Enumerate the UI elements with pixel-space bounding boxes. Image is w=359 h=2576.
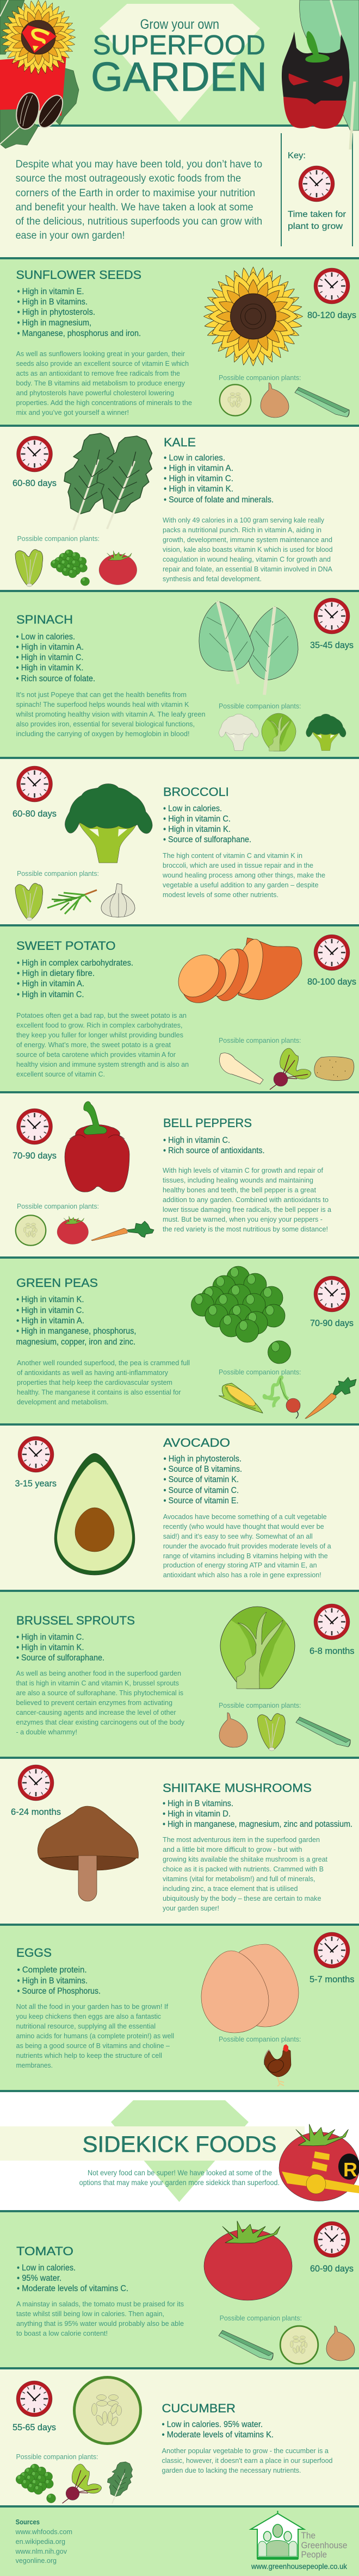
panel: avocado	[0, 1426, 359, 1590]
bullet list	[17, 2263, 128, 2293]
bullet list: • High in vitamin K.	[16, 663, 84, 673]
body text: growth, development, immune system maintenance and	[163, 536, 332, 544]
icon: eggs	[201, 1944, 299, 2033]
bullet list: • 95% water.	[17, 2274, 61, 2283]
bullet list: • High in B vitamins.	[163, 1799, 233, 1808]
radish	[264, 1377, 300, 1418]
body text: membranes.	[16, 2061, 53, 2069]
body text: coagulation in wound healing, vitamin C for growth and	[163, 555, 331, 563]
panel: sidekick foods banner	[0, 2092, 359, 2210]
body text: addition to any garden. Combined with antioxidants to	[163, 1196, 329, 1204]
body text: Another well rounded superfood, the pea is crammed full	[17, 1359, 190, 1367]
body text: garden due to lacking the necessary nutrients.	[162, 2466, 301, 2474]
bullet list: • High in vitamin C.	[163, 1136, 230, 1145]
bullet list: • High in vitamin C.	[164, 474, 233, 483]
companion label: Possible companion plants:	[219, 702, 301, 710]
bullet list: • High in vitamin A.	[16, 1316, 84, 1326]
bullet list: • High in magnesium,	[17, 319, 91, 327]
body text	[16, 2300, 184, 2337]
intro text: Not every food can be super! We have looked at some of the	[88, 2168, 272, 2177]
heading: AVOCADO	[163, 1436, 230, 1449]
body text: including zinc, a trace element that is utilised	[163, 1884, 298, 1893]
banner ribbon	[0, 2126, 305, 2161]
bullet list: • Moderate levels of vitamins K.	[162, 2430, 274, 2440]
illustration: superhero sunflower	[0, 0, 82, 148]
body text: The high content of vitamin C and vitamin K in	[163, 851, 302, 860]
body text: healthy bones and teeth, the bell pepper is a great	[163, 1186, 316, 1194]
body text	[16, 350, 192, 416]
icon: clock	[16, 436, 52, 472]
panel: sunflower seeds	[0, 259, 359, 425]
title	[91, 17, 267, 99]
bullet list: • Low in calories.	[164, 453, 225, 463]
body text: nutrients which help to keep the structure of cell	[16, 2051, 162, 2059]
key box: Time taken for	[288, 210, 346, 219]
icon: sweet potato slices	[170, 936, 302, 1012]
companion plants	[219, 1377, 356, 1418]
heading: SIDEKICK FOODS	[83, 2131, 276, 2157]
body text: spinach! The superfood helps wounds heal with vitamin K	[16, 700, 189, 708]
body text: amino acids for humans (a complete protein!) as well	[16, 2032, 174, 2040]
heading: SWEET POTATO	[16, 939, 116, 953]
body text: A mainstay in salads, the tomato must be praised for its	[16, 2300, 184, 2308]
icon: avocado	[54, 1453, 135, 1575]
body text	[16, 1011, 189, 1078]
bullet list: • Rich source of folate.	[16, 674, 95, 683]
body text	[163, 516, 333, 583]
body text: tissues, including healing wounds and maintaining	[163, 1176, 313, 1184]
panel: footer	[0, 2507, 359, 2576]
icon: broccoli	[65, 784, 152, 863]
intro text: corners of the Earth in order to maximise your nutrition	[16, 188, 255, 199]
sources	[15, 2518, 72, 2565]
icon: clock	[16, 2381, 52, 2417]
icon: sunflower	[196, 259, 311, 374]
body text	[162, 851, 325, 899]
body text: development and metabolism.	[17, 1398, 109, 1406]
bullet list	[164, 453, 274, 505]
companion label: Possible companion plants:	[17, 534, 100, 543]
icon: cucumber	[74, 2377, 140, 2443]
icon: clock	[314, 1932, 350, 1968]
body text: modest levels of some other nutrients.	[163, 891, 278, 899]
panel: cucumber	[0, 2369, 359, 2505]
body text: broccoli, which are used in tissue repair and in the	[163, 861, 313, 869]
intro text	[79, 2168, 280, 2187]
website url: www.greenhousepeople.co.uk	[251, 2562, 348, 2571]
companion plants	[15, 550, 137, 587]
bullet list	[17, 287, 141, 338]
bullet list: • High in vitamin K.	[164, 484, 233, 494]
icon: clock	[314, 268, 350, 304]
body text: properties that help keep the cardiovascular system	[17, 1378, 172, 1386]
bullet list	[163, 1136, 264, 1155]
illustration: superhero pepper with spinach	[282, 0, 359, 150]
body text: and phytosterols have powerful cholesterol lowering	[16, 389, 174, 397]
bullet list: • High in vitamin C.	[163, 814, 231, 824]
bullet list: • Source of B vitamins.	[163, 1465, 242, 1474]
carrot	[91, 1221, 154, 1241]
bullet list: • High in vitamin C.	[17, 990, 84, 999]
body text: they keep you fuller for longer whilst providing bundles	[16, 1031, 183, 1039]
body text: must. But be warned, when you enjoy your peppers -	[163, 1215, 323, 1223]
bullet list	[16, 1633, 104, 1663]
companion label: Possible companion plants:	[219, 1036, 301, 1044]
body text: It's not just Popeye that can get the health benefits from	[16, 690, 187, 699]
body text: As well as being another food in the superfood garden	[16, 1669, 181, 1677]
body text: Avocados have become something of a cult vegetable	[163, 1513, 327, 1521]
icon: clock	[16, 1109, 52, 1144]
body text: to boast a low calorie content!	[16, 2329, 108, 2337]
icon: clock	[18, 1765, 54, 1801]
body text: vision, kale also boasts vitamin K which is used for blood	[163, 545, 333, 553]
icon: clock	[314, 935, 350, 970]
panel: green peas	[0, 1259, 359, 1423]
heading: TOMATO	[16, 2244, 73, 2258]
body text: your garden super!	[163, 1904, 219, 1912]
body text: lower tissue damaging free radicals, the bell pepper is a	[163, 1205, 332, 1214]
body text: healthy vision and immune system strength and is also an	[16, 1060, 189, 1068]
icon: clock	[314, 1276, 350, 1312]
body text: seeds also provide an excellent source of vitamin E which	[16, 359, 189, 368]
bullet list: • High in vitamin E.	[17, 287, 84, 296]
body text: source of beta carotene which provides vitamin A for	[16, 1050, 176, 1059]
bullet list	[162, 2420, 274, 2440]
time label: 55-65 days	[13, 2422, 56, 2432]
bullet list: magnesium, copper, iron and zinc.	[16, 1337, 135, 1347]
heading: KALE	[164, 435, 196, 449]
panel: kale	[0, 427, 359, 590]
time label: 60-80 days	[13, 808, 57, 819]
body text	[163, 1835, 327, 1912]
title: GARDEN	[91, 54, 267, 99]
body text	[163, 1166, 332, 1233]
bullet list: • High in phytosterols.	[163, 1454, 242, 1464]
body text: healthy. The manganese it contains is also essential for	[17, 1388, 181, 1396]
panel: tomato	[0, 2212, 359, 2367]
bullet list: • Source of sulforaphane.	[16, 1653, 104, 1663]
companion plants	[16, 2462, 133, 2504]
body text: production of energy storing ATP and vitamin E, an	[163, 1561, 317, 1569]
icon: clock	[314, 2222, 350, 2257]
bullet list: • Low in calories.	[163, 804, 222, 813]
body text: acts as an antioxidant to remove free radicals from the	[16, 369, 180, 377]
body text: cancer-causing agents and increase the level of other	[16, 1708, 176, 1716]
carrot	[305, 1377, 356, 1418]
body text: With only 49 calories in a 100 gram serving kale really	[163, 516, 324, 524]
time label: 3-15 years	[15, 1478, 57, 1489]
body text: of antioxidants as well as having anti-inflammatory	[17, 1368, 168, 1377]
intro text: source the most outrageously exotic foods from the	[16, 173, 241, 184]
bullet list: • Source of vitamin K.	[163, 1475, 239, 1484]
intro text: Despite what you may have been told, you don’t have to	[16, 159, 262, 170]
heading: CUCUMBER	[162, 2401, 236, 2415]
bullet list: • High in vitamin K.	[163, 825, 231, 834]
companion label: Possible companion plants:	[16, 2453, 98, 2461]
bullet list: • High in vitamin A.	[16, 643, 84, 652]
body text: synthesis and fetal development.	[163, 575, 262, 583]
time label: 70-90 days	[13, 1150, 57, 1161]
icon: clock	[314, 1604, 350, 1640]
bullet list: • Manganese, phosphorus and iron.	[17, 329, 141, 338]
body text: - a double whammy!	[16, 1728, 77, 1736]
bullet list: • High in vitamin A.	[164, 464, 233, 473]
bullet list: • Low in calories. 95% water.	[162, 2420, 263, 2429]
bullet list	[163, 1454, 242, 1505]
bullet list: • Source of folate and minerals.	[164, 495, 274, 505]
bullet list	[16, 632, 95, 683]
bullet list: • High in B vitamins.	[17, 297, 88, 307]
body text: vegetable a useful addition to any garden – despite	[163, 881, 319, 889]
sources: en.wikipedia.org	[16, 2537, 65, 2546]
heading: BROCCOLI	[163, 785, 229, 799]
companion label: Possible companion plants:	[220, 2314, 302, 2322]
rosemary	[47, 890, 97, 914]
body text: nutritional resource, supplying all the essential	[16, 2022, 156, 2030]
heading: GREEN PEAS	[16, 1276, 98, 1290]
bullet list	[16, 1295, 136, 1347]
corn	[219, 1382, 263, 1413]
sources: www.whfoods.com	[15, 2528, 72, 2536]
bullet list: • High in vitamin C.	[16, 1306, 84, 1315]
companion plants	[16, 1215, 154, 1246]
icon: bell pepper	[65, 1102, 129, 1192]
icon: clock	[16, 766, 52, 802]
title: SUPERFOOD	[92, 29, 265, 60]
bullet list: • Complete protein.	[17, 1965, 87, 1975]
body text: mix and you’ve got yourself a winner!	[16, 408, 129, 416]
key box: plant to grow	[288, 222, 343, 231]
icon: sidekick tomato: R	[343, 2158, 357, 2181]
bullet list: • High in complex carbohydrates.	[17, 959, 133, 968]
body text: said!) and it’s easy to see why. Somewhat of an all	[163, 1532, 313, 1540]
bullet list: • Low in calories.	[17, 2263, 76, 2273]
bullet list: • High in B vitamins.	[17, 1976, 88, 1986]
icon: brussel sprout	[220, 1607, 295, 1689]
diamond background	[111, 2100, 249, 2202]
logo: The Greenhouse People: Greenhouse	[301, 2540, 347, 2550]
body text: taste whilst still being low in calories. Then again,	[16, 2310, 164, 2318]
bullet list: • High in vitamin K.	[16, 1295, 84, 1304]
body text: wound healing process among other things, make the	[162, 871, 325, 879]
panel: shiitake mushrooms	[0, 1759, 359, 1924]
panel: sweet potato	[0, 926, 359, 1091]
bullet list: • High in vitamin K.	[16, 1643, 84, 1652]
heading: SHIITAKE MUSHROOMS	[163, 1781, 312, 1795]
time label: 70-90 days	[310, 1318, 354, 1328]
bullet list: • High in vitamin C.	[16, 653, 84, 662]
body text: rounder the avocado fruit provides moderate levels of a	[163, 1542, 331, 1550]
body text: believed to prevent certain enzymes from activating	[16, 1698, 172, 1707]
icon: sidekick tomato	[279, 2124, 359, 2201]
garlic	[101, 883, 135, 917]
body text: whilst promoting healthy vision with vitamin A. The leafy green	[16, 710, 205, 718]
body text: Not all the food in your garden has to be grown! If	[16, 2002, 168, 2011]
intro text	[16, 159, 262, 241]
body text: antioxidant which also has a role in gene expression!	[163, 1571, 321, 1579]
panel: bell peppers	[0, 1093, 359, 1256]
intro text: and benefit your health. We have taken a look at some	[16, 202, 253, 213]
body text: enzymes that clear existing carcinogens out of the body	[16, 1718, 184, 1726]
body text: anything that is 95% water would probably also be able	[16, 2319, 184, 2328]
bullet list	[163, 804, 251, 844]
heading: BRUSSEL SPROUTS	[16, 1614, 135, 1627]
companion plants	[219, 1713, 350, 1751]
body text	[162, 2447, 333, 2474]
body text: excellent source of vitamin C.	[16, 1070, 105, 1078]
companion plants	[219, 713, 346, 751]
sources: vegonline.org	[16, 2556, 57, 2565]
heading: SPINACH	[16, 613, 73, 626]
icon: tomato	[204, 2221, 292, 2300]
body text: vitamins (vital for metabolism!) and full of minerals,	[163, 1875, 315, 1883]
companion plants	[219, 1048, 354, 1090]
panel: brussel sprouts	[0, 1592, 359, 1757]
body text: The most adventurous item in the superfood garden	[163, 1835, 320, 1844]
body text: body. The B vitamins aid metabolism to produce energy	[16, 379, 185, 387]
heading: EGGS	[16, 1946, 52, 1959]
heading: SUNFLOWER SEEDS	[16, 268, 141, 282]
body text: as being a good source of B vitamins and choline –	[16, 2042, 170, 2050]
intro text: options that may make your garden more sidekick than superfood.	[79, 2178, 280, 2187]
time label: 60-80 days	[13, 478, 57, 488]
bullet list	[17, 959, 133, 999]
companion plants	[220, 383, 349, 418]
logo: The Greenhouse People: People	[301, 2549, 327, 2560]
body text: recently (who would have thought that would ever be	[163, 1522, 324, 1530]
body text	[17, 1359, 190, 1406]
body text: repair and folate, an essential B vitamin involved in DNA	[163, 565, 332, 573]
bullet list	[163, 1799, 352, 1829]
body text: packs a nutritional punch. Rich in vitamin A, aiding in	[163, 526, 321, 534]
body text: choice as it is packed with nutrients. Crammed with B	[163, 1865, 324, 1873]
time label: 5-7 months	[310, 1974, 355, 1984]
body text: that is high in vitamin C and vitamin K, brussel sprouts	[16, 1679, 179, 1687]
body text: Potatoes often get a bad rap, but the sweet potato is an	[16, 1011, 187, 1019]
key box: Key:	[288, 151, 306, 160]
body text: With high levels of vitamin C for growth and repair of	[163, 1166, 323, 1174]
panel: spinach	[0, 592, 359, 757]
bullet list: • Source of sulforaphane.	[163, 835, 251, 844]
body text: including the carrying of oxygen by hemoglobin in blood!	[16, 730, 189, 738]
time label: 35-45 days	[310, 640, 354, 650]
time label: 80-100 days	[307, 976, 356, 987]
bullet list: • High in vitamin A.	[17, 979, 84, 988]
body text: also provides iron, essential for several biological functions,	[16, 720, 195, 728]
bullet list	[17, 1965, 101, 1996]
body text: are also a source of sulforaphane. This phytochemical is	[16, 1689, 183, 1697]
panel: introduction	[0, 127, 359, 257]
body text: excellent food to grow. Rich in complex carbohydrates,	[16, 1021, 183, 1029]
diamond background	[100, 4, 260, 122]
bullet list: • Source of Phosphorus.	[17, 1987, 101, 1996]
sources: www.nlm.nih.gov	[15, 2547, 67, 2555]
bullet list: • High in phytosterols.	[17, 308, 95, 317]
panel: eggs	[0, 1926, 359, 2090]
body text: and a little bit more difficult to grow - but with	[163, 1845, 302, 1853]
icon: clock	[18, 1436, 54, 1472]
companion label: Possible companion plants:	[219, 374, 301, 382]
time label: 6-24 months	[11, 1807, 61, 1817]
companion plants	[219, 2326, 355, 2364]
icon: clock	[314, 598, 350, 634]
key box	[281, 133, 352, 246]
bullet list: • High in dietary fibre.	[17, 969, 95, 978]
body text	[16, 690, 205, 738]
time label: 60-90 days	[310, 2263, 354, 2274]
intro text: of the delicious, nutritious superfoods you can grow with	[16, 216, 262, 227]
icon: spinach leaves	[199, 601, 298, 695]
icon: mushroom	[38, 1806, 138, 1901]
time label: 6-8 months	[310, 1646, 355, 1656]
bullet list: • Source of vitamin E.	[163, 1496, 238, 1505]
body text	[16, 1669, 184, 1736]
companion label: Possible companion plants:	[17, 869, 99, 878]
body text: classic, however, it doesn't earn a place in our superfood	[162, 2456, 333, 2465]
body text: As well as sunflowers looking great in your garden, their	[16, 350, 185, 358]
sources: Sources	[16, 2518, 40, 2526]
body text: ubiquitously by the body – these are certain to make	[163, 1894, 321, 1902]
bullet list: • Rich source of antioxidants.	[163, 1146, 264, 1155]
companion label: Possible companion plants:	[219, 1368, 301, 1376]
heading: BELL PEPPERS	[163, 1116, 252, 1130]
bullet list: • High in manganese, phosphorus,	[16, 1327, 136, 1336]
panel: header	[0, 0, 359, 125]
bullet list: • Source of vitamin C.	[163, 1486, 239, 1495]
companion label: Possible companion plants:	[219, 1701, 301, 1709]
intro text: ease in your own garden!	[16, 230, 125, 241]
logo: The Greenhouse People	[251, 2511, 347, 2560]
body text: of energy. What’s more, the sweet potato is a great	[16, 1041, 171, 1049]
body text: you keep chickens then eggs are also a fantastic	[16, 2012, 161, 2020]
time label: 80-120 days	[307, 310, 356, 320]
body text: Another popular vegetable to grow - the cucumber is a	[162, 2447, 329, 2455]
body text	[16, 2002, 174, 2069]
icon: kale leaves	[64, 433, 152, 530]
bullet list: • High in vitamin D.	[163, 1809, 231, 1819]
icon: peas	[191, 1266, 290, 1364]
body text: growing kits available the shiitake mushroom is a great	[163, 1855, 327, 1863]
companion plants	[15, 883, 135, 920]
logo: The Greenhouse People: The	[301, 2530, 315, 2541]
bullet list: • Low in calories.	[16, 632, 75, 642]
companion label: Possible companion plants:	[219, 2035, 301, 2043]
bullet list: • Moderate levels of vitamins C.	[17, 2284, 128, 2293]
panel: broccoli	[0, 759, 359, 924]
companion label: Possible companion plants:	[17, 1202, 99, 1210]
body text: the red variety is the most nutritious by some distance!	[163, 1225, 328, 1233]
title: Grow your own	[140, 17, 219, 32]
body text: range of vitamins including B vitamins helping with the	[163, 1552, 328, 1560]
body text: properties. Add the high concentrations of minerals to the	[16, 399, 192, 407]
body text	[163, 1513, 331, 1579]
bullet list: • High in vitamin C.	[16, 1633, 84, 1642]
icon: chicken	[264, 2044, 291, 2086]
